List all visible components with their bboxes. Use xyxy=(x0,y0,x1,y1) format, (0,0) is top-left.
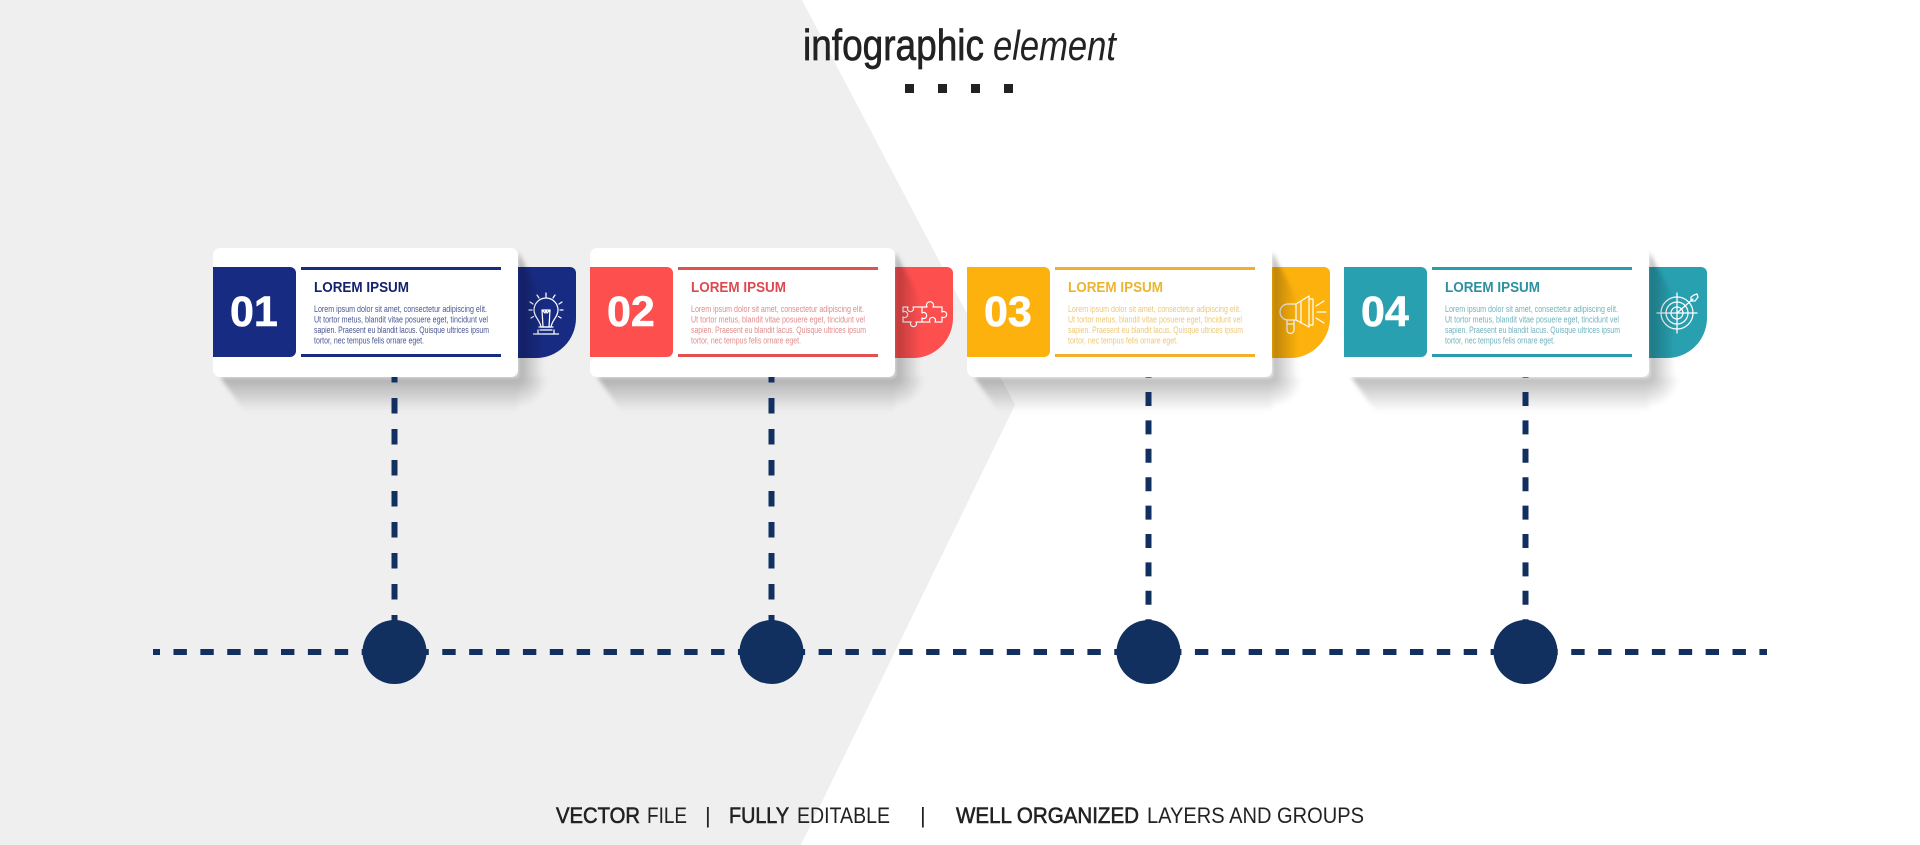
step 03 xyxy=(967,248,1330,625)
text block 01: sapien. Praesent eu blandit lacus. Quisque ultrices ipsum xyxy=(314,325,489,335)
number box 03 xyxy=(967,267,1050,357)
text block 03: Ut tortor metus, blandit vitae posuere eget, tincidunt vel xyxy=(1068,314,1242,324)
tab 03 xyxy=(1264,267,1330,358)
footer text: LAYERS AND GROUPS xyxy=(1147,803,1364,828)
title: infographic xyxy=(803,21,984,70)
connector 01 xyxy=(392,367,398,625)
text block 03 xyxy=(1055,267,1255,357)
icon: megaphone xyxy=(1280,296,1326,333)
text block 04: Lorem ipsum dolor sit amet, consectetur adipiscing elit. xyxy=(1445,304,1618,314)
footer text: | xyxy=(705,803,711,828)
title: element xyxy=(993,22,1118,69)
text block 03: tortor, nec tempus felis ornare eget. xyxy=(1068,336,1178,346)
connector 02 xyxy=(768,367,774,625)
footer text xyxy=(556,803,1364,828)
text block 04 xyxy=(1432,267,1632,357)
title dots xyxy=(905,84,1013,93)
footer text: FILE xyxy=(647,803,687,828)
number box 03: 03 xyxy=(984,288,1032,336)
text block 01: Ut tortor metus, blandit vitae posuere eget, tincidunt vel xyxy=(314,314,488,324)
step 04 xyxy=(1344,248,1707,625)
text block 04: tortor, nec tempus felis ornare eget. xyxy=(1445,336,1555,346)
card shadow xyxy=(974,252,1302,412)
background arrow shape xyxy=(0,0,1015,845)
card 04 xyxy=(1344,248,1649,377)
footer text: VECTOR xyxy=(556,803,640,828)
step 02 xyxy=(590,248,953,625)
number box 04: 04 xyxy=(1361,288,1409,336)
card shadow xyxy=(597,252,925,412)
title xyxy=(803,21,1118,70)
card 03 xyxy=(967,248,1272,377)
text block 03: Lorem ipsum dolor sit amet, consectetur adipiscing elit. xyxy=(1068,304,1241,314)
text block 02 xyxy=(678,267,878,357)
icon: light bulb xyxy=(529,293,563,334)
text block 01: Lorem ipsum dolor sit amet, consectetur adipiscing elit. xyxy=(314,304,487,314)
text block 01 xyxy=(301,267,501,357)
icon: target xyxy=(1657,293,1698,333)
timeline nodes xyxy=(362,620,1558,684)
text block 01: tortor, nec tempus felis ornare eget. xyxy=(314,336,424,346)
timeline dashed line xyxy=(153,649,1767,655)
text block 04: sapien. Praesent eu blandit lacus. Quisque ultrices ipsum xyxy=(1445,325,1620,335)
text block 02: sapien. Praesent eu blandit lacus. Quisque ultrices ipsum xyxy=(691,325,866,335)
number box 02 xyxy=(590,267,673,357)
text block 03: LOREM IPSUM xyxy=(1068,280,1163,296)
tab 01 xyxy=(510,267,576,358)
step 01 xyxy=(213,248,576,625)
footer text: | xyxy=(920,803,926,828)
number box 02: 02 xyxy=(607,288,655,336)
text block 04: Ut tortor metus, blandit vitae posuere eget, tincidunt vel xyxy=(1445,314,1619,324)
connector 03 xyxy=(1146,364,1152,625)
card 01 xyxy=(213,248,518,377)
card shadow xyxy=(220,252,548,412)
footer text: EDITABLE xyxy=(797,803,890,828)
number box 01 xyxy=(213,267,296,357)
text block 04: LOREM IPSUM xyxy=(1445,280,1540,296)
number box 04 xyxy=(1344,267,1427,357)
card 02 xyxy=(590,248,895,377)
connector 04 xyxy=(1522,364,1528,625)
icon: puzzle xyxy=(903,302,947,327)
tab 02 xyxy=(887,267,953,358)
text block 01: LOREM IPSUM xyxy=(314,280,409,296)
text block 02: Lorem ipsum dolor sit amet, consectetur adipiscing elit. xyxy=(691,304,864,314)
footer text: WELL ORGANIZED xyxy=(956,803,1139,828)
text block 02: tortor, nec tempus felis ornare eget. xyxy=(691,336,801,346)
footer text: FULLY xyxy=(729,803,789,828)
tab 04 xyxy=(1641,267,1707,358)
text block 02: LOREM IPSUM xyxy=(691,280,786,296)
text block 03: sapien. Praesent eu blandit lacus. Quisque ultrices ipsum xyxy=(1068,325,1243,335)
number box 01: 01 xyxy=(230,288,278,336)
text block 02: Ut tortor metus, blandit vitae posuere eget, tincidunt vel xyxy=(691,314,865,324)
card shadow xyxy=(1351,252,1679,412)
